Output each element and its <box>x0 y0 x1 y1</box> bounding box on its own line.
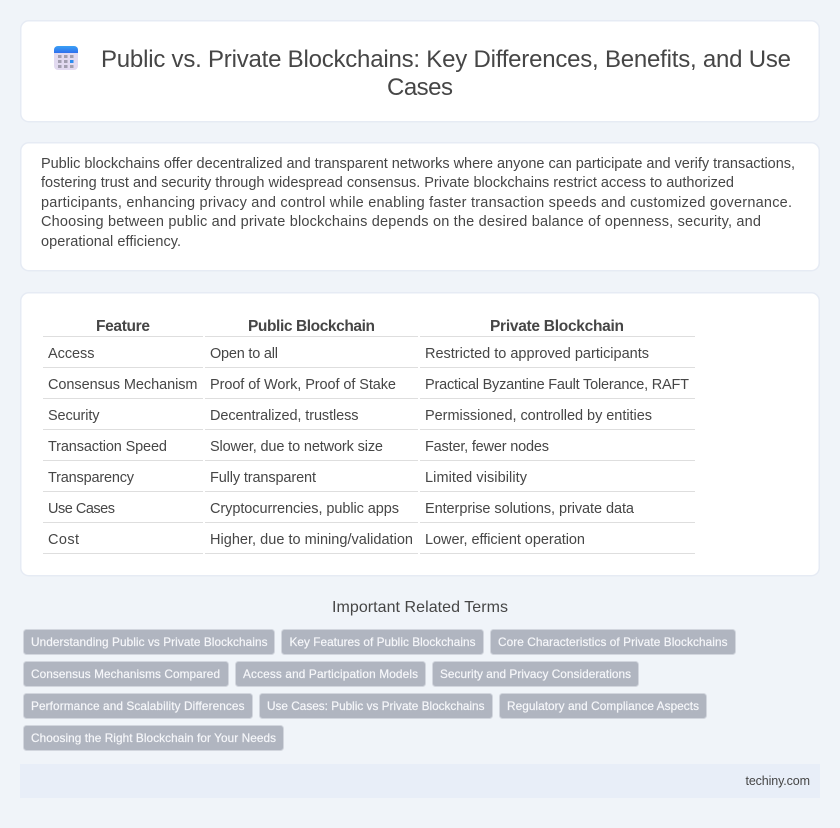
table row: Consensus Mechanism: Practical Byzantine Fault Tolerance, RAFT <box>425 377 689 393</box>
table row: Use Cases: Use Cases <box>48 501 115 517</box>
text block: intro <box>41 156 795 250</box>
footer: techiny.com <box>746 774 810 788</box>
title: Cases <box>387 74 453 101</box>
panel: intro paragraph <box>21 143 819 271</box>
tag: Choosing the Right Blockchain for Your Needs <box>31 731 276 745</box>
footer <box>20 764 820 798</box>
table row: Use Cases <box>43 501 695 523</box>
table row: Access: Access <box>48 346 94 362</box>
text block: intro: operational efficiency. <box>41 234 181 250</box>
tag <box>24 694 252 718</box>
table row: Transparency: Limited visibility <box>425 470 528 486</box>
tag: Use Cases: Public vs Private Blockchains <box>267 699 485 713</box>
table row: Consensus Mechanism: Consensus Mechanism <box>48 377 198 393</box>
tag <box>24 630 274 654</box>
table row: Cost <box>43 532 695 554</box>
table row: Cost: Lower, efficient operation <box>425 532 585 548</box>
table row: Security: Permissioned, controlled by entities <box>425 408 652 424</box>
table row: Transparency <box>43 470 695 492</box>
table row: Security: Decentralized, trustless <box>210 408 358 424</box>
panel: comparison table <box>21 293 819 576</box>
tag <box>24 726 284 750</box>
text block: intro: Public blockchains offer decentralized and transparent networks where anyone can participate and verify transactions, <box>41 156 795 172</box>
table row: Transparency: Transparency <box>48 470 135 486</box>
table row: Access <box>43 346 695 368</box>
tag: Performance and Scalability Differences <box>31 699 245 713</box>
table row: Transaction Speed: Transaction Speed <box>48 439 167 455</box>
table header: Private Blockchain <box>490 318 624 335</box>
title: Public vs. Private Blockchains: Key Differences, Benefits, and Use <box>101 46 791 73</box>
tag: Key Features of Public Blockchains <box>290 635 476 649</box>
table row: Use Cases: Enterprise solutions, private data <box>425 501 635 517</box>
tag: Understanding Public vs Private Blockchains <box>31 635 268 649</box>
heading: related terms: Important Related Terms <box>332 599 508 616</box>
table row: Cost: Higher, due to mining/validation <box>210 532 413 548</box>
table row: Access: Restricted to approved participants <box>425 346 649 362</box>
table header: Feature <box>96 318 150 335</box>
table row: Security: Security <box>48 408 100 424</box>
table row: Use Cases: Cryptocurrencies, public apps <box>210 501 399 517</box>
tag: Security and Privacy Considerations <box>440 667 631 681</box>
icon: calendar grid <box>54 46 78 70</box>
related term tags <box>24 630 736 750</box>
panel: title card <box>21 21 819 122</box>
table row: Cost: Cost <box>48 532 79 548</box>
tag: Consensus Mechanisms Compared <box>31 667 220 681</box>
table header <box>43 318 695 337</box>
table row: Access: Open to all <box>210 346 278 362</box>
text block: intro: fostering trust and security through widespread consensus. Private blockchains restrict access to authorized <box>41 175 734 191</box>
tag <box>490 630 736 654</box>
text block: intro: Choosing between public and private blockchains depends on the desired balance of openness, security, and <box>41 214 761 230</box>
title <box>101 46 791 101</box>
table row: Transaction Speed: Slower, due to network size <box>210 439 383 455</box>
table header: Public Blockchain <box>248 318 375 335</box>
tag: Access and Participation Models <box>243 667 418 681</box>
tag <box>500 694 706 718</box>
tag: Regulatory and Compliance Aspects <box>507 699 699 713</box>
table row: Consensus Mechanism: Proof of Work, Proof of Stake <box>210 377 396 393</box>
table row: Transparency: Fully transparent <box>210 470 316 486</box>
table row: Transaction Speed: Faster, fewer nodes <box>425 439 549 455</box>
text block: intro: participants, enhancing privacy and control while enabling faster transaction speeds and customized governance. <box>41 195 792 211</box>
table row: Security <box>43 408 695 430</box>
tag <box>24 662 228 686</box>
tag <box>432 662 638 686</box>
table row: Transaction Speed <box>43 439 695 461</box>
tag <box>236 662 426 686</box>
tag <box>260 694 492 718</box>
tag: Core Characteristics of Private Blockchains <box>498 635 728 649</box>
tag <box>282 630 484 654</box>
table row: Consensus Mechanism <box>43 377 695 399</box>
